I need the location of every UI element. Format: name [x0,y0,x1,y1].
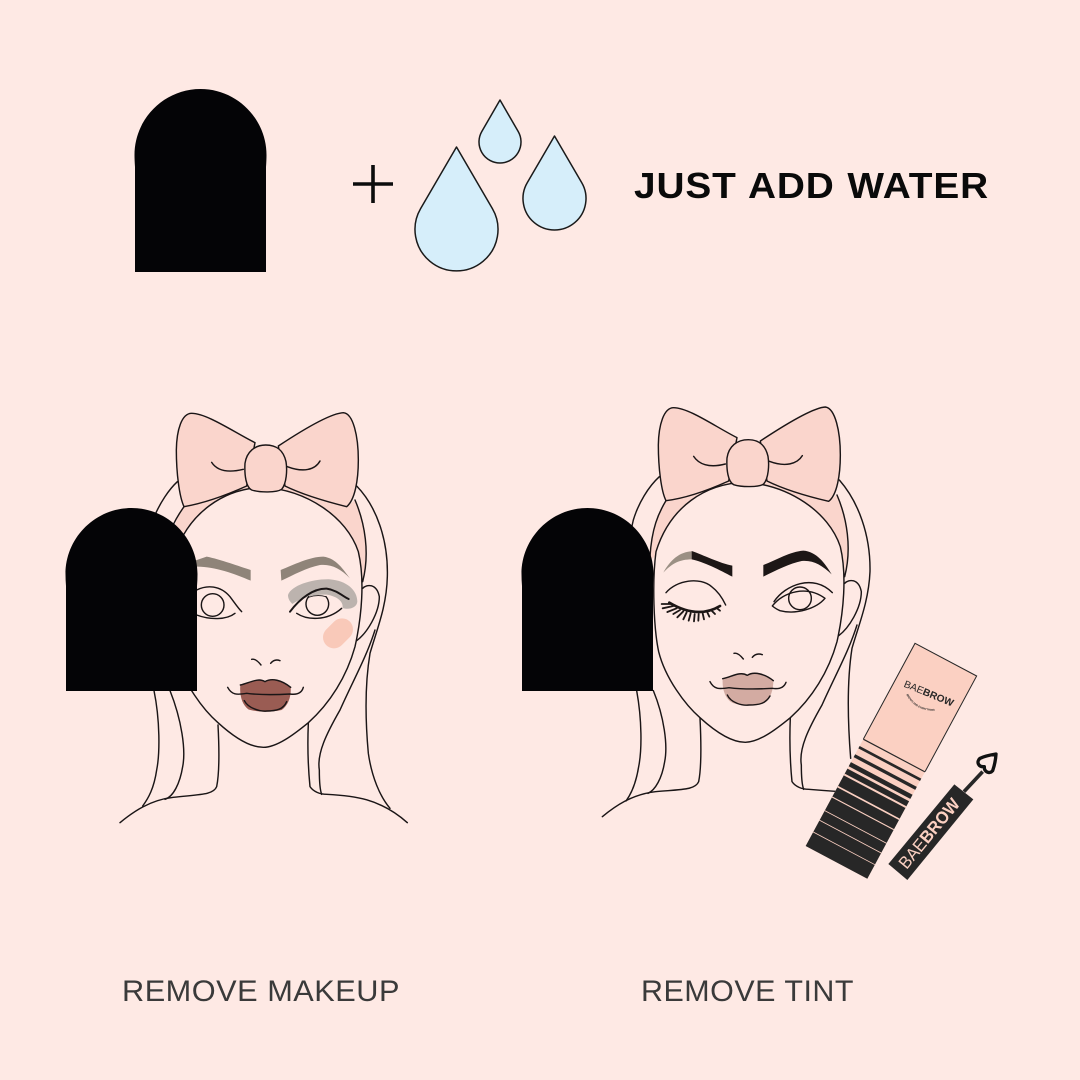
illustration: face with makeup [120,413,407,823]
eyeshadow [288,579,357,609]
product box [806,642,978,879]
bow [658,407,840,501]
heading: just add water: JUST ADD WATER [634,165,989,206]
icon: plus sign [353,165,393,203]
brows [195,557,350,581]
lips [228,680,303,712]
headband [650,480,848,577]
nose [252,659,280,665]
ear [357,586,379,641]
product: baebrow box and tube [806,642,998,880]
nose [734,653,762,659]
bow [176,413,358,507]
head outline [172,487,362,747]
label: remove makeup: REMOVE MAKEUP [122,975,400,1008]
ear [839,581,861,636]
headband [170,486,366,582]
head outline [654,482,844,742]
eyes [197,587,349,619]
icon: black mitt (right) [522,508,654,691]
open eye [772,583,832,612]
illustration: face with brow tint [602,407,870,817]
hair and neck lines [120,482,407,823]
tagline [904,692,942,717]
brows [663,551,832,577]
icon: water drops [415,100,586,271]
icon: black mitt (left) [66,508,198,691]
tint tube: BAEBROW [894,794,964,873]
hair and neck lines [602,477,870,817]
closed eye and lashes [662,581,726,621]
label: remove tint: REMOVE TINT [641,975,854,1008]
icon: black mitt (top) [134,89,266,272]
blush [334,629,342,637]
brand name: BAEBROW [902,679,956,710]
lips [710,673,786,705]
product box: BROWS AND EVERYTHING [906,694,935,711]
tint tube [888,754,996,880]
